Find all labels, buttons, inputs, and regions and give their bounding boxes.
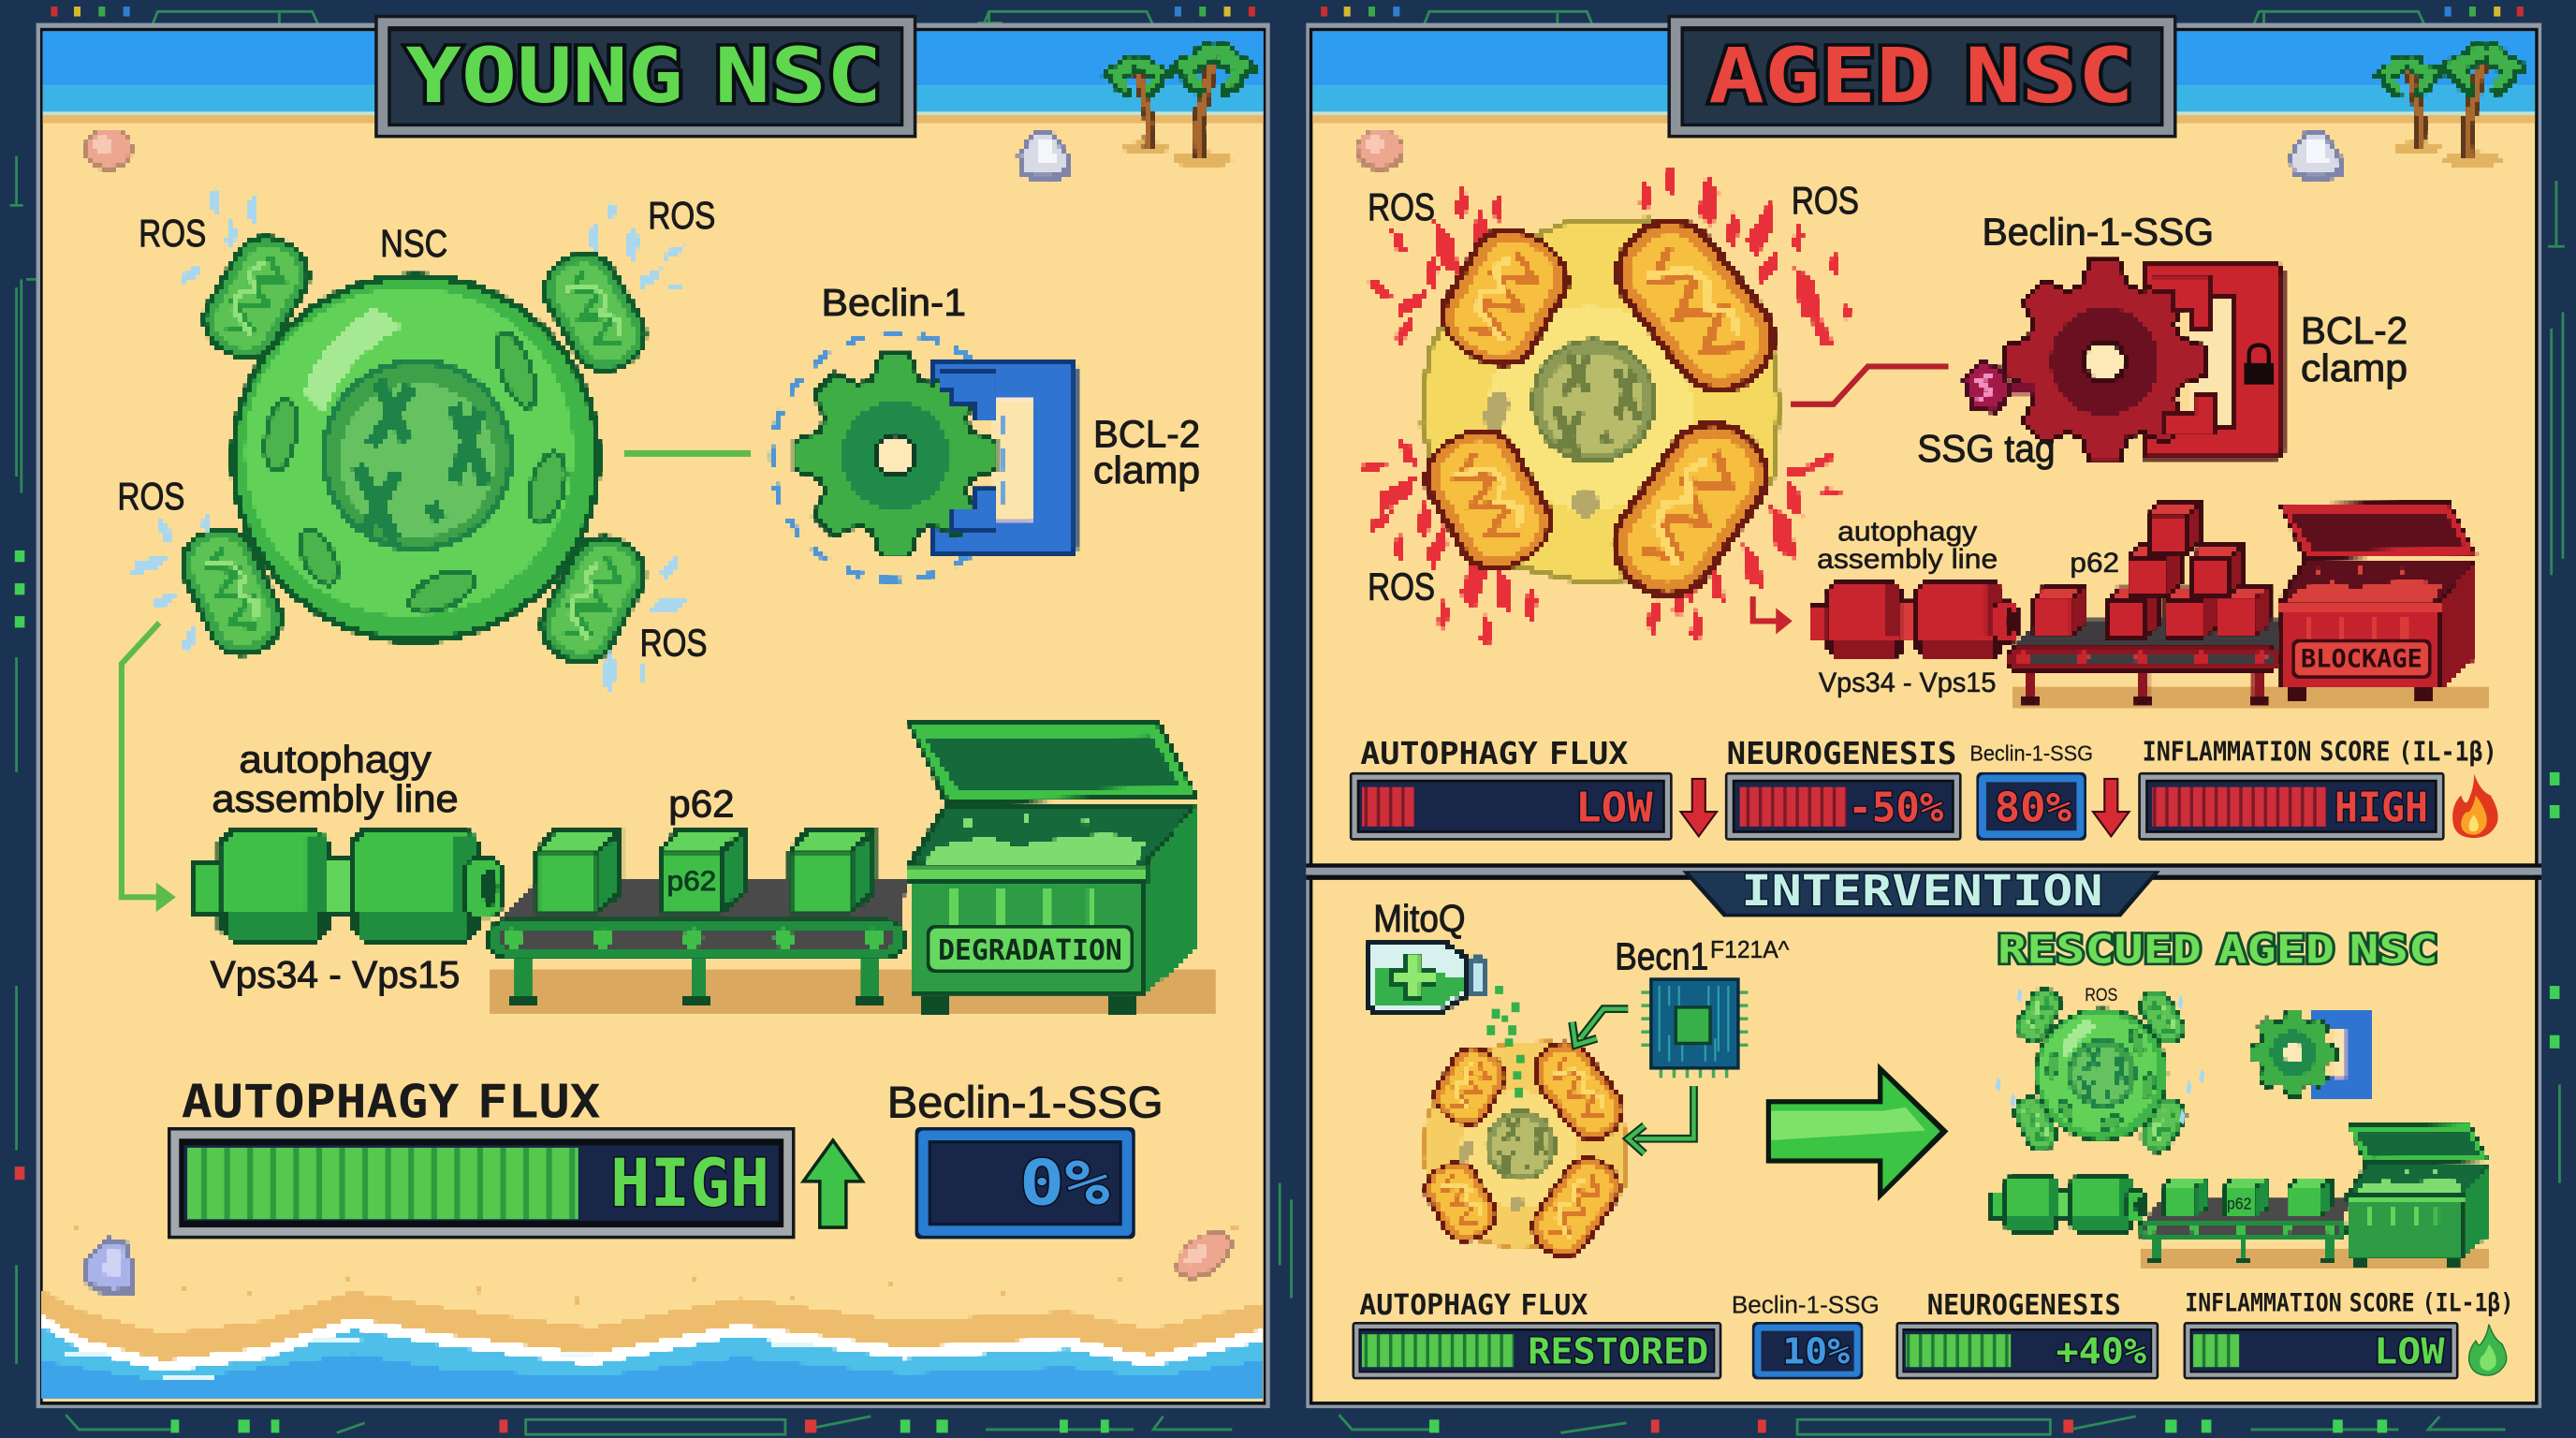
icon: green drops: [1486, 986, 1525, 1097]
value box: 10%: 10%: [1782, 1331, 1850, 1373]
beach waves: [41, 1225, 1264, 1400]
label: BLOCKAGE plate: BLOCKAGE: [2301, 646, 2422, 674]
label: neurogenesis: NEUROGENESIS: [1927, 1289, 2121, 1322]
value box: 80%: 80%: [1995, 785, 2072, 832]
panel: aged NSC background: [1306, 23, 2541, 1408]
metric: young autophagy flux: [168, 1074, 795, 1239]
connector line: red: [1791, 366, 1949, 404]
bar: low: LOW: [1575, 785, 1653, 832]
label: p62: p62: [2070, 548, 2119, 579]
icon: yellow aged cell: [1409, 198, 1797, 619]
label: autophagy assembly line: [1817, 516, 1998, 575]
shadow: [2141, 1249, 2489, 1269]
label: autophagy assembly line: assembly line: [212, 777, 459, 820]
icon: small mitochondria: [2008, 982, 2192, 1159]
label: BCL-2 clamp: clamp: [2301, 346, 2408, 389]
arrow: chip to cell top: [1573, 1009, 1628, 1045]
title: rescued aged NSC: [1998, 926, 2438, 972]
icon: green flame: [2469, 1325, 2507, 1375]
icon: clamp hooks over gear: [940, 372, 996, 529]
icon: palm trees and shells right: [1355, 43, 2530, 181]
arrow: big green rescue: [1766, 1064, 1949, 1201]
bar: low: LOW: [2374, 1331, 2445, 1373]
bar: high: HIGH: [610, 1145, 769, 1222]
label: ROS upper left: ROS: [1368, 185, 1435, 228]
panel: young NSC beach background: [37, 23, 1270, 1408]
label: p62: p62: [668, 782, 735, 825]
icon: MitoQ bottle: [1367, 938, 1488, 1014]
title: young NSC: [374, 15, 916, 138]
icon: clamp hooks over red gear: [2152, 276, 2215, 433]
label: p62 on box: p62: [667, 866, 716, 897]
label: autophagy assembly line: autophagy: [1837, 516, 1977, 547]
label: Vps34-Vps15: Vps34 - Vps15: [211, 953, 460, 996]
icon: small dumpster: [2346, 1123, 2490, 1268]
icon: padlock: [2244, 345, 2274, 385]
icon: dark red gear: [2006, 263, 2203, 460]
label: Beclin-1-SSG: Beclin-1-SSG: [1732, 1290, 1880, 1318]
icon: green dumpster: [905, 718, 1199, 1014]
label: NSC: NSC: [380, 222, 447, 265]
icon: small green cell: [2034, 1007, 2168, 1141]
bar: high: HIGH: [2334, 785, 2428, 832]
assembly line: young: [191, 718, 1216, 1014]
arrow: green flow to assembly line: [122, 623, 176, 912]
arrow: down: [1680, 779, 1717, 836]
bar: high: [2138, 772, 2445, 841]
Beclin-1 gear and BCL-2 clamp: [772, 281, 1200, 580]
icon: blue clamp: [772, 333, 1077, 580]
arrow: down: [2093, 779, 2130, 836]
value box: 0%: [915, 1127, 1135, 1239]
metrics row: aged: [1350, 735, 2498, 841]
value box: 10%: [1752, 1322, 1863, 1379]
title: aged NSC: NSC: [1965, 33, 2134, 121]
icon: aged cell under treatment: [1415, 1029, 1636, 1269]
title: rescued aged NSC: AGED: [2217, 926, 2334, 972]
icon: small sparks: [1996, 988, 2204, 1124]
title: rescued aged NSC: NSC: [2349, 926, 2438, 972]
shadow: [490, 970, 1216, 1014]
label: inflammation: INFLAMMATION SCORE (IL-1β): [2143, 737, 2497, 768]
shadow: [2012, 687, 2489, 708]
icon: palm trees and shells: [78, 43, 1260, 1301]
label: BCL-2 clamp: BCL-2: [2301, 309, 2408, 352]
bar: +40%: +40%: [2056, 1331, 2146, 1373]
title: aged NSC: AGED: [1708, 33, 1932, 121]
arrow: red flow: [1753, 596, 1793, 634]
label: BLOCKAGE plate: [2291, 639, 2432, 679]
label: inflammation: INFLAMMATION SCORE (IL-1β): [2185, 1290, 2513, 1318]
label: autophagy flux: AUTOPHAGY FLUX: [182, 1074, 600, 1128]
title: aged NSC: [1667, 15, 2177, 138]
label: Beclin-1-SSG: Beclin-1-SSG: [1983, 211, 2214, 254]
label: autophagy flux: AUTOPHAGY FLUX: [1359, 1289, 1588, 1322]
icon: pale ROS sparks: [126, 184, 691, 693]
label: autophagy assembly line: autophagy: [239, 738, 432, 781]
label: Becn1 F121A: Becn1: [1615, 935, 1708, 978]
label: Vps34-Vps15: Vps34 - Vps15: [1819, 668, 1996, 698]
icon: red dumpster: [2277, 501, 2478, 702]
icon: green mitochondria: [168, 221, 660, 678]
label: DEGRADATION plate: [927, 925, 1134, 973]
label: Becn1 F121A: F121A^: [1710, 935, 1790, 963]
label: SSG tag: SSG tag: [1917, 427, 2056, 470]
icon: red machine: [1808, 580, 2019, 661]
label: ROS upper right: ROS: [1792, 179, 1859, 222]
label: Beclin-1-SSG small: Beclin-1-SSG: [1969, 741, 2093, 766]
label: BCL-2 clamp: [1093, 412, 1200, 492]
label: p62 small: p62: [2227, 1195, 2251, 1213]
label: ROS lower left: ROS: [117, 475, 184, 518]
bar: -50%: [1725, 772, 1962, 841]
label: Becn1 F121A: [1615, 935, 1790, 978]
label: Beclin-1: Beclin-1: [822, 281, 966, 324]
icon: microchip: [1641, 977, 1748, 1078]
young cell with mitochondria: [117, 184, 715, 693]
banner: intervention: INTERVENTION: [1741, 866, 2103, 916]
icon: green gear: [797, 357, 994, 553]
label: autophagy assembly line: [212, 738, 459, 820]
bar: +40%: [1895, 1322, 2159, 1379]
icon: SSG tag: [1962, 359, 2034, 414]
bar: low: [2184, 1322, 2459, 1379]
icon: small gear: [2251, 1011, 2335, 1095]
icon: Vps34-Vps15 machine: [191, 827, 503, 943]
rescued cell: [1989, 926, 2490, 1269]
icon: fire: [2452, 774, 2498, 838]
icon: small machine: [1989, 1175, 2145, 1233]
label: Beclin-1-SSG: Beclin-1-SSG: [887, 1078, 1164, 1127]
label: DEGRADATION plate: DEGRADATION: [938, 934, 1122, 967]
icon: conveyor belt with boxes: [487, 831, 907, 1007]
label: ROS small: ROS: [2085, 986, 2117, 1005]
metric: Beclin-1-SSG young: [887, 1078, 1164, 1239]
title: young NSC: NSC: [714, 33, 882, 121]
label: ROS lower right: ROS: [640, 621, 708, 664]
icon: conveyor with piled boxes: [2006, 503, 2282, 703]
label: ROS top right: ROS: [648, 194, 715, 237]
bar: low: [1350, 772, 1673, 841]
label: autophagy assembly line: assembly line: [1817, 544, 1998, 575]
value box: 80%: [1976, 772, 2086, 841]
icon: green stem cell: [230, 272, 601, 644]
arrow: chip to cell side: [1628, 1086, 1694, 1153]
connector line: cell to gear: [624, 450, 751, 457]
icon: small clamp: [2310, 1010, 2371, 1097]
bar: high: [168, 1127, 795, 1239]
assembly line: aged: [1808, 501, 2489, 708]
label: autophagy flux: AUTOPHAGY FLUX: [1360, 735, 1628, 771]
bar: restored: [1352, 1322, 1721, 1379]
Beclin-1-SSG gear and clamp: [1917, 211, 2408, 470]
title: young NSC: YOUNG: [406, 33, 683, 121]
intervention left: treatments and cell: [1367, 897, 1790, 1269]
label: BCL-2 clamp: clamp: [1093, 448, 1200, 492]
icon: small conveyor: [2137, 1178, 2348, 1264]
bar: restored: RESTORED: [1528, 1331, 1708, 1373]
bar: -50%: -50%: [1848, 785, 1944, 832]
label: ROS lower: ROS: [1368, 565, 1435, 609]
title: rescued aged NSC: RESCUED: [1998, 926, 2202, 972]
metrics row: intervention: [1352, 1289, 2513, 1379]
label: neurogenesis: NEUROGENESIS: [1727, 735, 1956, 771]
label: ROS top left: ROS: [139, 212, 206, 255]
label: BCL-2 clamp: [2301, 309, 2408, 389]
icon: red clamp: [2143, 263, 2285, 460]
arrow: up green: [803, 1140, 862, 1227]
icon: red ROS sparks: [1358, 163, 1852, 649]
value box: 0%: 0%: [1019, 1146, 1110, 1219]
aged cell with mitochondria: [1358, 163, 1859, 649]
label: MitoQ: MitoQ: [1373, 897, 1466, 940]
label: BCL-2 clamp: BCL-2: [1093, 412, 1200, 455]
banner: intervention: [1682, 866, 2160, 917]
